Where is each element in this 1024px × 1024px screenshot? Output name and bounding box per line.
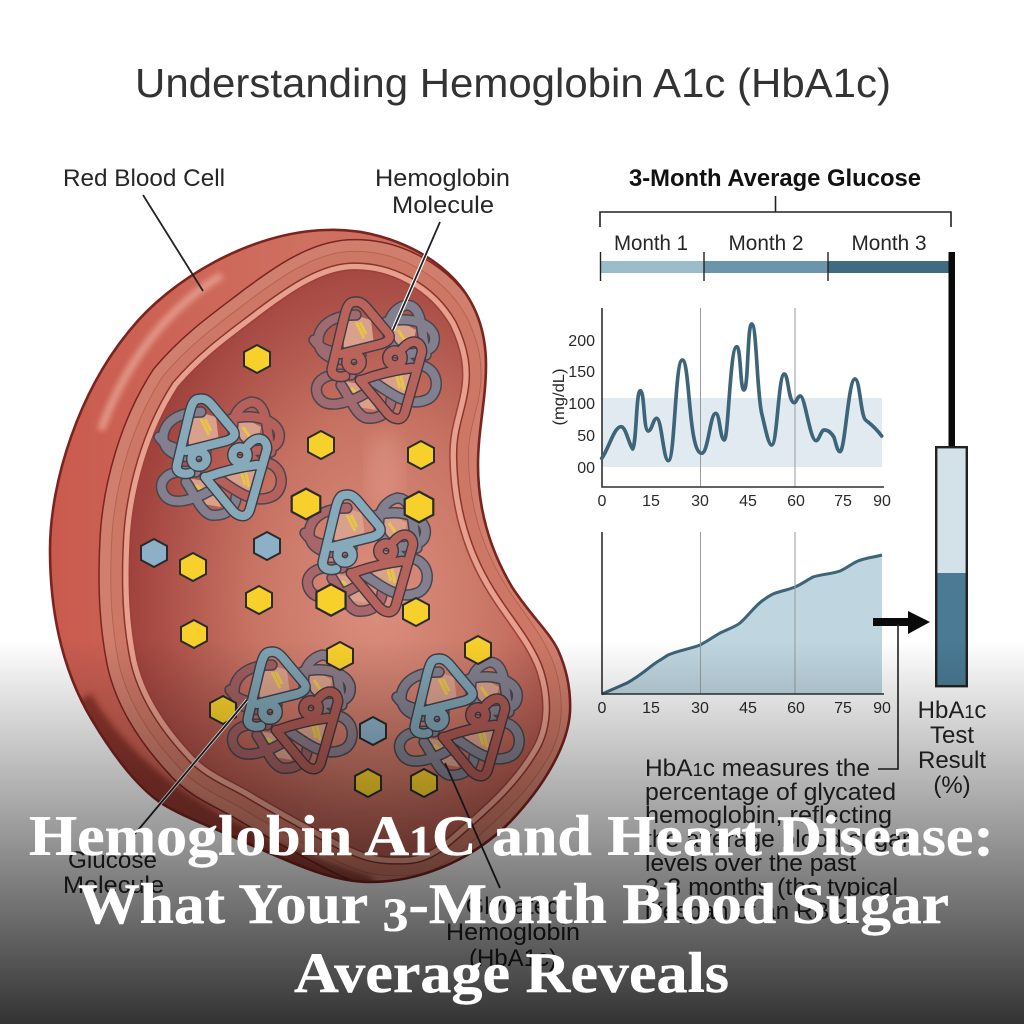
timeline: 3-month average glucose xyxy=(600,165,951,281)
illustration: red blood cell xyxy=(50,230,570,890)
area chart: cumulative HbA1c xyxy=(598,532,891,717)
line chart: daily glucose: 200 xyxy=(568,333,595,350)
tube label: HbA1c xyxy=(918,697,986,724)
dark gradient overlay xyxy=(0,640,1024,1024)
tube label: Result xyxy=(918,747,986,774)
membrane highlight xyxy=(102,277,219,427)
cell interior xyxy=(129,270,543,857)
line chart: daily glucose: 100 xyxy=(568,396,595,413)
headline: Hemoglobin A 1C and Heart Disease: xyxy=(29,805,994,868)
explanation text with leader: percentage of glycated xyxy=(645,779,896,806)
hemoglobin molecules xyxy=(159,302,519,776)
headline: -Month Blood Sugar xyxy=(408,873,949,936)
label: glycated hemoglobin: Hemoglobin xyxy=(446,919,580,946)
explanation text with leader: 2-3 months (the typical xyxy=(645,874,898,901)
line chart: daily glucose: 50 xyxy=(577,428,595,445)
explanation text with leader: HbA1c measures the xyxy=(645,755,870,782)
line chart: daily glucose: 00 xyxy=(577,460,595,477)
line chart: daily glucose: 90 xyxy=(873,493,891,510)
label: red blood cell: Red Blood Cell xyxy=(63,165,225,192)
label: glycated hemoglobin: Glycated xyxy=(466,893,560,920)
label: glucose molecule: Glucose xyxy=(68,847,157,874)
area chart: cumulative HbA1c: 30 xyxy=(691,700,709,717)
label: hemoglobin molecule xyxy=(375,165,510,330)
line chart: daily glucose: 60 xyxy=(787,493,805,510)
diagram title: Understanding Hemoglobin A1c (HbA1c) xyxy=(135,60,891,106)
line chart: daily glucose: (mg/dL) xyxy=(551,368,568,426)
area chart: cumulative HbA1c: 45 xyxy=(739,700,757,717)
blue glycating molecules xyxy=(141,532,386,745)
timeline: 3-month average glucose: Month 3 xyxy=(852,232,926,255)
cell body xyxy=(50,230,570,882)
label: red blood cell xyxy=(63,165,225,291)
glucose molecules xyxy=(180,345,491,797)
line chart: daily glucose xyxy=(551,308,891,510)
line chart: daily glucose: 0 xyxy=(598,493,607,510)
area chart: cumulative HbA1c: 0 xyxy=(598,700,607,717)
headline: 3 xyxy=(383,889,408,942)
timeline: 3-month average glucose: 3-Month Average Glucose xyxy=(629,165,921,192)
line chart: daily glucose: 75 xyxy=(834,493,852,510)
tube label xyxy=(918,697,986,799)
cell membrane layers xyxy=(80,270,543,890)
explanation text with leader: hemoglobin, reflecting xyxy=(645,802,892,829)
area chart: cumulative HbA1c: 75 xyxy=(834,700,852,717)
explanation text with leader xyxy=(645,624,910,925)
line chart: daily glucose: 45 xyxy=(739,493,757,510)
timeline: 3-month average glucose: Month 1 xyxy=(614,232,688,255)
line chart: daily glucose: 150 xyxy=(568,364,595,381)
interior light spot xyxy=(367,432,403,508)
label: hemoglobin molecule: Molecule xyxy=(392,192,494,219)
area chart: cumulative HbA1c: 60 xyxy=(787,700,805,717)
test result tube xyxy=(936,447,967,686)
label: hemoglobin molecule: Hemoglobin xyxy=(375,165,510,192)
label: glucose molecule: Molecule xyxy=(63,872,164,899)
tube label: Test xyxy=(930,722,974,749)
label: glycated hemoglobin: (HbA1c) xyxy=(469,945,557,972)
headline xyxy=(29,805,994,1005)
line chart: daily glucose: 30 xyxy=(691,493,709,510)
glucose trace xyxy=(602,324,882,461)
label: glucose molecule xyxy=(63,700,247,899)
area chart: cumulative HbA1c: 15 xyxy=(642,700,660,717)
connector bar to test tube xyxy=(948,252,955,448)
shaded lower rim xyxy=(80,700,370,890)
headline: What Your xyxy=(78,873,346,936)
headline: Average Reveals xyxy=(294,942,729,1005)
explanation text with leader: lifespan of an RBC) xyxy=(645,898,855,925)
explanation text with leader: the average blood sugar xyxy=(645,826,910,853)
timeline: 3-month average glucose: Month 2 xyxy=(728,232,804,255)
tube label: (%) xyxy=(933,772,971,799)
explanation text with leader: levels over the past xyxy=(645,850,856,877)
area chart: cumulative HbA1c: 90 xyxy=(873,700,891,717)
arrow into tube xyxy=(873,611,930,634)
cell outline xyxy=(50,230,570,882)
line chart: daily glucose: 15 xyxy=(642,493,660,510)
label: glycated hemoglobin xyxy=(445,763,580,972)
